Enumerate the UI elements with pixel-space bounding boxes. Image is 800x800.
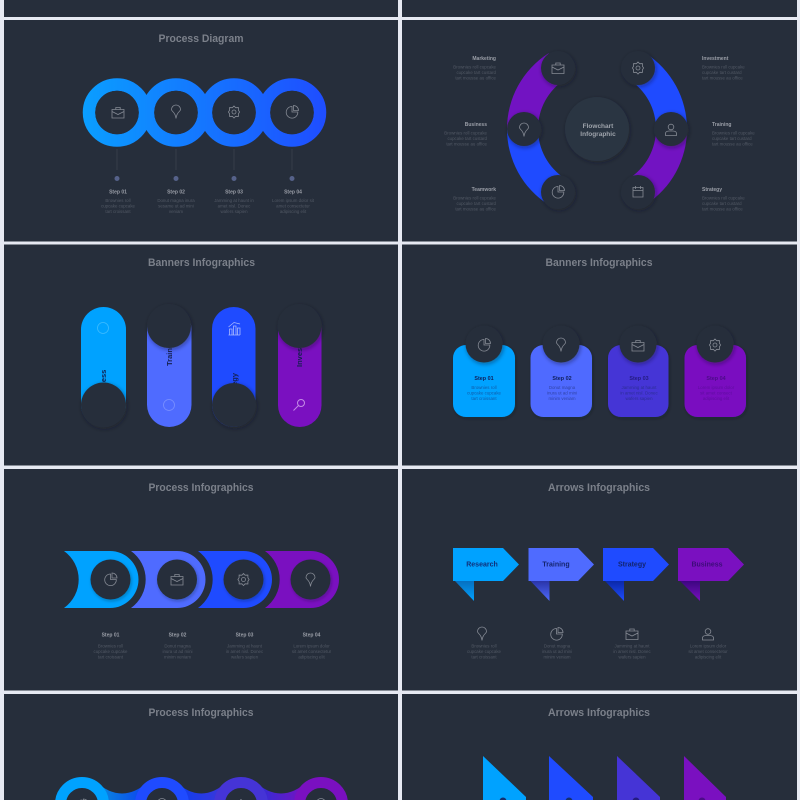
arrow: training <box>528 548 594 601</box>
label: investment: Brownies roll cupcake <box>702 64 745 70</box>
label: investment <box>702 56 745 80</box>
column 2: icon and text: minim veniam <box>543 654 571 660</box>
ring 2 <box>140 782 184 800</box>
label: marketing: Marketing <box>472 56 496 62</box>
column 4: icon and text: Lorem ipsum dolor <box>690 644 727 648</box>
label: investment: tart mousse au office <box>702 76 743 80</box>
step 02 text: veniam <box>169 209 183 214</box>
card: step 03: Jamming at haunt <box>622 385 657 390</box>
arrow: strategy <box>603 548 669 601</box>
column 3: icon and text: Jamming at haunt <box>615 644 650 648</box>
pill 4: Investment <box>295 327 304 367</box>
node: training icon <box>654 112 688 146</box>
label: teamwork: tart mousse au office <box>455 206 497 212</box>
step 03 text: amet nisl. Donec <box>218 204 251 208</box>
arrow: strategy: Strategy <box>618 562 646 568</box>
label: investment: cupcake tart custard <box>702 70 742 75</box>
step 04 text: Lorem ipsum dolor <box>293 644 330 648</box>
pill 3 <box>212 307 256 427</box>
step 01 text: Step 01 <box>109 190 127 196</box>
card: step 02: minim veniam <box>548 396 576 401</box>
step 02 text: inura ut ad mini <box>162 649 193 654</box>
card: step 03: in amet nisl. Donec <box>620 390 658 396</box>
step 03 text: Step 03 <box>225 190 243 196</box>
step 01 text: cupcake cupcake <box>101 204 136 208</box>
heading: banners infographics: Banners Infographics <box>546 257 652 269</box>
card: step 04: Step 04 <box>706 376 726 382</box>
panel: process diagram <box>4 20 398 242</box>
label: business: Brownies roll cupcake <box>444 130 488 136</box>
card: step 02: inura ut ad mini <box>547 390 577 396</box>
circular arc segments <box>507 53 687 205</box>
crescent 4 <box>265 551 339 608</box>
panel: process infographics crescents <box>4 469 398 690</box>
step 02 text: minim veniam <box>164 654 191 660</box>
heading: arrows infographics: Arrows Infographics <box>548 482 650 494</box>
center circle: Flowchart <box>583 123 614 130</box>
card: step 03 <box>608 326 668 417</box>
label: marketing: tart mousse au office <box>455 76 497 80</box>
label: training: Brownies roll cupcake <box>712 130 755 136</box>
label: training: tart mousse au office <box>712 142 753 146</box>
card: step 04: adipiscing elit <box>703 396 730 401</box>
card: step 01: Step 01 <box>474 376 494 382</box>
panel: arrows infographics triangles (cropped) <box>402 694 797 800</box>
label: marketing: Brownies roll cupcake <box>453 64 497 70</box>
label: training <box>712 122 755 146</box>
label: training: cupcake tart custard <box>712 136 752 141</box>
step 01 text: tart croissant <box>105 209 131 214</box>
arrow: training: Training <box>542 562 570 568</box>
step 03 text: Jamming at haunt in <box>214 198 254 203</box>
card: step 04 <box>684 326 746 417</box>
step 04 text: sit amet consectetur <box>292 649 332 654</box>
ring 1 <box>60 782 104 800</box>
step 02 text <box>162 632 193 660</box>
step 02 text: Step 02 <box>167 190 185 196</box>
pill 1: Business <box>99 370 108 403</box>
heading: banners infographics: Banners Infographics <box>148 257 255 269</box>
step 03 text <box>226 632 264 660</box>
label: teamwork: cupcake tart custard <box>456 201 497 206</box>
column 3: icon and text: in amet nisl. Donec <box>613 649 651 654</box>
column 4: icon and text <box>688 629 728 660</box>
label: marketing: cupcake tart custard <box>456 70 497 75</box>
chain of rings <box>89 84 320 140</box>
column 2: icon and text: Donut magna <box>544 644 571 648</box>
card: step 01 <box>453 326 515 417</box>
label: training: Training <box>712 122 731 128</box>
center circle: Infographic <box>580 131 616 138</box>
step 04 text: Step 04 <box>303 632 321 638</box>
column 3: icon and text <box>613 629 651 660</box>
step 03 text <box>214 190 254 214</box>
heading: process infographics: Process Infographics <box>148 707 254 719</box>
column 1: icon and text: Brownies roll <box>471 644 497 648</box>
step 01 text: Step 01 <box>102 632 120 638</box>
label: business: cupcake tart custard <box>447 136 488 141</box>
center circle <box>565 97 629 161</box>
step 01 text: Brownies roll <box>98 644 123 648</box>
panel: banners cards <box>402 244 797 466</box>
step 01 text <box>94 632 128 660</box>
step 01 text <box>101 190 136 214</box>
column 2: icon and text <box>542 628 572 660</box>
step 01 text: Brownies roll <box>105 198 131 203</box>
step 04 text: adipiscing elit <box>280 209 307 214</box>
panel: banners pills <box>4 244 398 466</box>
crescent 3 <box>198 551 272 608</box>
card: step 03: Step 03 <box>629 376 649 382</box>
heading: process infographics: Process Infographics <box>148 482 254 494</box>
column 4: icon and text: adipiscing elit <box>695 654 722 660</box>
arrow: business <box>678 548 744 601</box>
step 02 text: Step 02 <box>169 632 187 638</box>
step 04 text: amet consectetur <box>276 204 310 208</box>
node: investment icon <box>621 51 655 85</box>
label: business: Business <box>465 122 487 128</box>
triangle 2 <box>549 756 593 800</box>
triangle 4 <box>684 756 726 800</box>
panel: top right cropped slide <box>402 0 797 17</box>
step 01 text: tart croissant <box>98 654 124 660</box>
step 04 text: Step 04 <box>284 190 302 196</box>
heading: arrows infographics: Arrows Infographics <box>548 707 650 719</box>
connectors <box>95 781 308 800</box>
column 1: icon and text: tart croissant <box>471 654 497 660</box>
card: step 02: Step 02 <box>552 376 572 382</box>
label: strategy <box>702 187 745 212</box>
card: step 01: tart croissant <box>471 396 497 401</box>
label: teamwork: Brownies roll cupcake <box>453 196 497 200</box>
label: business <box>444 122 488 146</box>
step 04 text <box>272 190 315 214</box>
triangle 3 <box>617 756 660 800</box>
label: strategy: cupcake tart custard <box>702 201 742 206</box>
column 1: icon and text: cupcake cupcake <box>467 649 502 654</box>
step 02 text <box>157 190 195 214</box>
icon: bulb <box>172 105 180 118</box>
ring 4 <box>300 782 342 800</box>
column 3: icon and text: wafers sapien <box>618 654 646 660</box>
pill 2 <box>147 304 192 427</box>
card: step 03: wafers sapien <box>625 396 653 401</box>
label: strategy: tart mousse au office <box>702 206 743 212</box>
step 02 text: sesame ut ad mini <box>158 204 194 208</box>
label: strategy: Strategy <box>702 187 722 193</box>
step 01 text: cupcake cupcake <box>94 649 128 654</box>
icon: gear <box>228 106 240 118</box>
step 02 text: Donut magna <box>164 644 191 648</box>
step 03 text: in amet nisl. Donec <box>226 649 264 654</box>
pill 2: Training <box>165 336 174 366</box>
connector lines and dots <box>114 149 294 181</box>
node: strategy icon <box>621 175 655 209</box>
step 03 text: wafers sapien <box>220 209 248 214</box>
step 02 text: Donut magna inura <box>157 198 195 203</box>
label: investment: Investment <box>702 56 729 62</box>
step 04 text: Lorem ipsum dolor sit <box>272 198 315 203</box>
step 03 text: Step 03 <box>236 632 254 638</box>
panel: top left cropped slide <box>4 0 398 17</box>
arrow: research <box>453 548 519 601</box>
node: teamwork icon <box>541 175 575 209</box>
card: step 04: Lorem ipsum dolor <box>698 385 735 390</box>
pill 3: Strategy <box>230 372 239 403</box>
step 04 text <box>292 632 332 660</box>
label: strategy: Brownies roll cupcake <box>702 196 745 200</box>
label: teamwork: Teamwork <box>472 187 496 193</box>
panel: process infographics chain (cropped) <box>4 694 398 800</box>
arrow: research: Research <box>466 562 498 568</box>
ring 3 <box>220 782 262 800</box>
arrow: business: Business <box>691 562 723 568</box>
card: step 02 <box>530 326 592 417</box>
pill 1 <box>81 307 126 428</box>
step 04 text: adipiscing elit <box>298 654 325 660</box>
panel: flowchart infographic <box>402 20 797 242</box>
step 03 text: wafers sapien <box>231 654 259 660</box>
label: business: tart mousse au office <box>446 142 488 146</box>
panel: arrows infographics <box>402 469 797 690</box>
node: marketing icon <box>541 51 575 85</box>
step 03 text: Jamming at haunt <box>227 644 263 648</box>
crescent 2 <box>131 551 206 608</box>
column 4: icon and text: sit amet consectetur <box>688 649 728 654</box>
card: step 01: cupcake cupcake <box>467 390 502 396</box>
pill 4 <box>278 304 322 427</box>
crescent 1 <box>64 551 138 608</box>
icon: briefcase <box>112 108 124 118</box>
column 1: icon and text <box>467 627 502 660</box>
triangle 1 <box>483 756 526 800</box>
label: teamwork <box>453 187 497 212</box>
card: step 02: Donut magna <box>549 385 576 390</box>
node: business icon <box>507 112 541 146</box>
card: step 01: Brownies roll <box>471 385 497 390</box>
label: marketing <box>453 56 497 80</box>
icon: pie chart <box>286 106 298 118</box>
card: step 04: sit amet consect <box>700 390 733 396</box>
heading: process diagram: Process Diagram <box>158 33 244 45</box>
column 2: icon and text: inura ut ad mini <box>542 649 572 654</box>
